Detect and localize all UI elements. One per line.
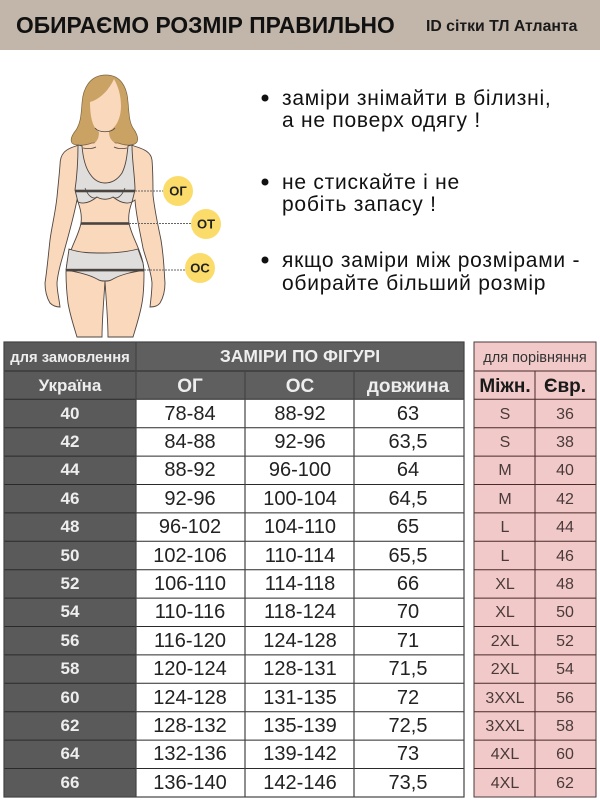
table rows: 106-110: [154, 573, 226, 595]
table rows: 92-96: [274, 431, 326, 453]
table rows: 46: [61, 489, 79, 508]
table rows: 78-84: [164, 403, 216, 425]
tip: underwear: [262, 87, 551, 132]
table rows: 64,5: [389, 488, 427, 510]
table rows: 48: [61, 517, 79, 536]
tip: between sizes: якщо заміри між розмірами -: [282, 249, 580, 272]
comparison rows: L: [501, 519, 510, 536]
comparison rows: 42: [556, 491, 574, 508]
comparison rows: 44: [556, 519, 574, 536]
table rows: 92-96: [164, 488, 216, 510]
size grid id: ID сітки ТЛ Атланта: [426, 18, 578, 35]
comparison rows: 40: [556, 462, 574, 479]
table rows: 110-114: [265, 545, 335, 567]
table rows: 72: [397, 687, 419, 709]
table rows: 128-131: [263, 658, 337, 680]
table rows: 72,5: [389, 715, 427, 737]
hair: [71, 75, 138, 145]
comparison rows: 58: [556, 718, 574, 735]
comparison rows: M: [498, 491, 512, 508]
comparison rows: 36: [556, 406, 574, 423]
neck and face: [90, 79, 121, 145]
comparison rows: XL: [495, 604, 515, 621]
table headers: довжина: [367, 376, 450, 397]
comparison rows: 56: [556, 690, 574, 707]
table rows: 128-132: [153, 715, 227, 737]
table rows: 62: [61, 716, 79, 735]
comparison headers: Міжн.: [479, 376, 531, 397]
tip: no tightening: [262, 171, 460, 216]
table rows: 52: [61, 574, 79, 593]
comparison rows: 62: [556, 775, 574, 792]
table rows: 64: [61, 744, 80, 763]
table rows: [61, 403, 427, 794]
table rows: 50: [61, 546, 79, 565]
table rows: 70: [397, 601, 419, 623]
comparison rows: 4XL: [491, 775, 519, 792]
table headers: ОГ: [177, 376, 203, 397]
comparison headers: [479, 350, 587, 397]
table rows: 88-92: [274, 403, 326, 425]
comparison rows: 3XXL: [485, 690, 525, 707]
table rows: 63: [397, 403, 419, 425]
table rows: 131-135: [263, 687, 337, 709]
table rows: 73,5: [389, 772, 427, 794]
table headers: ЗАМІРИ ПО ФІГУРІ: [220, 346, 380, 366]
table headers: для замовлення: [10, 350, 130, 366]
comparison rows: 52: [556, 633, 574, 650]
table rows: 66: [397, 573, 419, 595]
table rows: 124-128: [263, 630, 337, 652]
comparison rows: 48: [556, 576, 574, 593]
waist band: [81, 222, 129, 225]
comparison rows: S: [500, 406, 510, 423]
collarbone details: [83, 147, 127, 198]
table rows: 40: [61, 404, 79, 423]
table rows: 54: [61, 602, 80, 621]
tip: between sizes: [262, 249, 580, 295]
table rows: 65,5: [389, 545, 427, 567]
table rows: 96-102: [159, 516, 221, 538]
comparison rows: 54: [556, 661, 574, 678]
table rows: 135-139: [263, 715, 337, 737]
table rows: 132-136: [153, 743, 227, 765]
comparison table: [474, 342, 596, 797]
table rows: 124-128: [153, 687, 227, 709]
briefs: [66, 249, 144, 281]
table rows: 104-110: [264, 516, 336, 538]
comparison rows: 60: [556, 746, 574, 763]
table rows: 63,5: [389, 431, 427, 453]
hip band: [66, 269, 144, 271]
table headers: Україна: [39, 376, 102, 395]
table rows: 65: [397, 516, 419, 538]
dashed leaders: [129, 191, 192, 270]
tip: between sizes: обирайте більший розмір: [282, 272, 546, 295]
tip: underwear: а не поверх одягу !: [282, 109, 481, 132]
tip: no tightening: не стискайте і не: [282, 171, 460, 194]
tip: underwear: заміри знімайти в білизні,: [282, 87, 551, 110]
comparison rows: 2XL: [491, 633, 519, 650]
measurement table: [4, 342, 464, 797]
comparison rows: 46: [556, 548, 574, 565]
table rows: 71,5: [389, 658, 427, 680]
table rows: 118-124: [264, 601, 336, 623]
table rows: 71: [397, 630, 419, 652]
comparison rows: 2XL: [491, 661, 519, 678]
tip: no tightening: робіть запасу !: [282, 193, 437, 216]
label: ОГ: ОГ: [169, 184, 187, 198]
table rows: 88-92: [164, 459, 216, 481]
table rows: 58: [61, 659, 79, 678]
table rows: 114-118: [265, 573, 335, 595]
comparison rows: 50: [556, 604, 574, 621]
table rows: 56: [61, 631, 79, 650]
comparison rows: 3XXL: [485, 718, 525, 735]
table rows: 120-124: [153, 658, 227, 680]
label: ОС: [185, 253, 215, 283]
comparison headers: для порівняння: [483, 350, 587, 366]
comparison headers: Євр.: [544, 376, 586, 397]
label: ОГ: [163, 176, 193, 206]
comparison rows: XL: [495, 576, 515, 593]
table rows: 110-116: [155, 601, 225, 623]
table rows: 102-106: [153, 545, 227, 567]
label: ОС: ОС: [190, 260, 210, 276]
bra: [75, 145, 135, 203]
table rows: 73: [397, 743, 419, 765]
table rows: 116-120: [154, 630, 226, 652]
comparison rows: [485, 406, 574, 792]
table headers: ОС: [286, 376, 315, 397]
bust band: [75, 190, 135, 192]
table rows: 84-88: [164, 431, 216, 453]
header banner: [0, 0, 600, 50]
comparison rows: 4XL: [491, 746, 519, 763]
table rows: 66: [61, 773, 79, 792]
figure illustration: [45, 75, 221, 337]
comparison rows: S: [500, 434, 510, 451]
table rows: 142-146: [263, 772, 337, 794]
comparison rows: L: [501, 548, 510, 565]
comparison rows: M: [498, 462, 512, 479]
table rows: 96-100: [269, 459, 331, 481]
label: ОТ: ОТ: [197, 216, 215, 232]
chin line: [95, 128, 115, 132]
title: ОБИРАЄМО РОЗМІР ПРАВИЛЬНО: [16, 12, 395, 38]
table headers: [10, 346, 450, 397]
table rows: 64: [397, 459, 419, 481]
table rows: 136-140: [153, 772, 227, 794]
label: ОТ: [191, 209, 221, 239]
table rows: 100-104: [263, 488, 337, 510]
table rows: 42: [61, 432, 79, 451]
table rows: 139-142: [263, 743, 337, 765]
body: [45, 128, 165, 337]
table rows: 44: [61, 460, 80, 479]
comparison rows: 38: [556, 434, 574, 451]
table rows: 60: [61, 688, 79, 707]
